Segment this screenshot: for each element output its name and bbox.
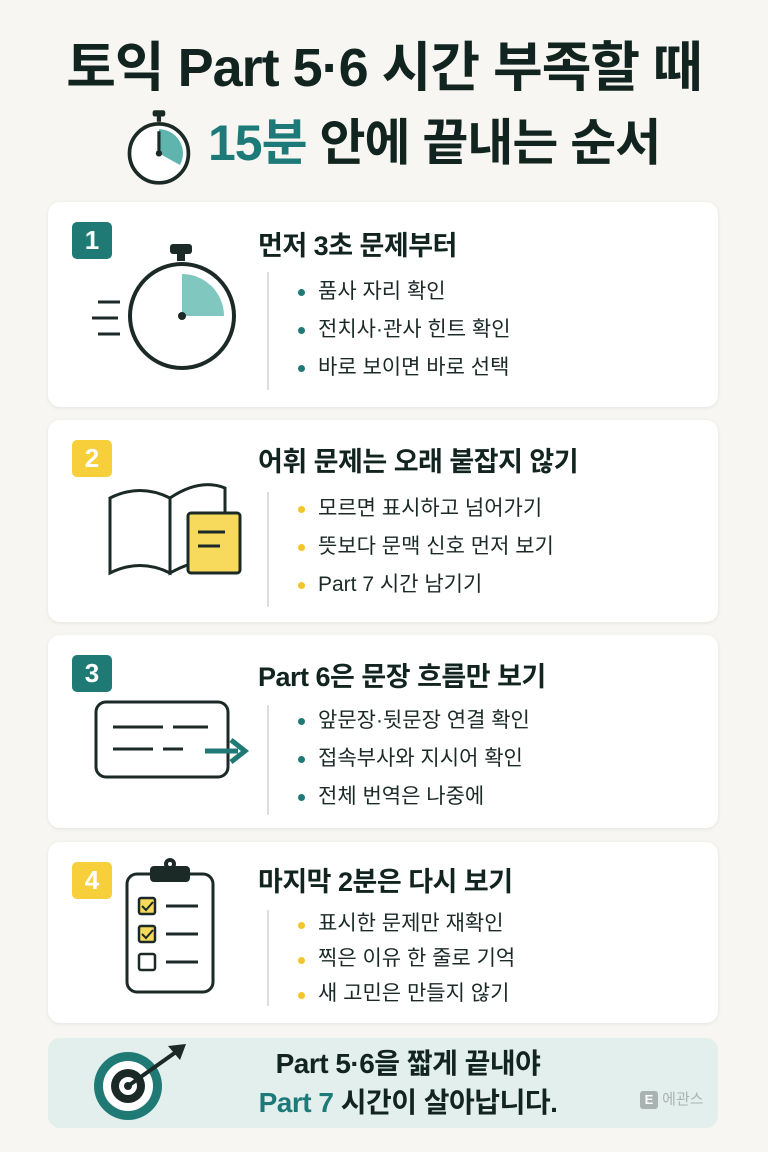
footer text: Part 5·6을 짧게 끝내야 xyxy=(276,1048,540,1079)
badge 2 xyxy=(72,440,112,477)
panel: step 4 xyxy=(48,842,718,1023)
badge 3 xyxy=(72,655,112,692)
bullets: 모르면 표시하고 넘어가기 xyxy=(318,497,542,520)
icon: book with note xyxy=(108,483,242,576)
badge 4: 4 xyxy=(85,865,99,895)
icon: stopwatch xyxy=(92,244,236,370)
watermark xyxy=(640,1091,704,1109)
heading: 마지막 2분은 다시 보기 xyxy=(258,867,513,897)
bullets xyxy=(298,280,511,379)
title: 토익 Part 5·6 시간 부족할 때 xyxy=(66,38,702,98)
bullets xyxy=(298,709,530,808)
bullets: 뜻보다 문맥 신호 먼저 보기 xyxy=(318,535,554,558)
icon: target xyxy=(94,1044,186,1120)
panel: step 2 xyxy=(48,420,718,622)
icon: sentence card arrow xyxy=(94,700,249,778)
bullets: 앞문장·뒷문장 연결 확인 xyxy=(318,709,530,732)
footer text: Part 7 시간이 살아납니다. xyxy=(259,1087,557,1118)
badge 3: 3 xyxy=(85,658,99,688)
icon: clipboard checklist xyxy=(126,858,214,994)
panel: footer callout xyxy=(48,1038,718,1128)
bullets: 접속부사와 지시어 확인 xyxy=(318,747,523,770)
bullets: 품사 자리 확인 xyxy=(318,280,446,303)
watermark: E xyxy=(645,1092,653,1107)
heading: 어휘 문제는 오래 붙잡지 않기 xyxy=(258,447,578,477)
badge 2: 2 xyxy=(85,443,99,473)
badge 1: 1 xyxy=(85,225,99,255)
bullets: 전체 번역은 나중에 xyxy=(318,785,484,808)
subtitle xyxy=(128,110,660,185)
bullets: 바로 보이면 바로 선택 xyxy=(318,356,509,379)
panel: step 1 xyxy=(48,202,718,407)
heading: 먼저 3초 문제부터 xyxy=(258,231,457,261)
bullets: 찍은 이유 한 줄로 기억 xyxy=(318,947,515,970)
icon: stopwatch xyxy=(128,110,190,185)
bullets xyxy=(298,912,515,1005)
panel: step 3 xyxy=(48,635,718,828)
bullets: 표시한 문제만 재확인 xyxy=(318,912,504,935)
watermark: 에관스 xyxy=(662,1091,704,1108)
badge 1 xyxy=(72,222,112,259)
bullets: Part 7 시간 남기기 xyxy=(318,573,482,596)
bullets: 전치사·관사 힌트 확인 xyxy=(318,318,511,341)
heading: Part 6은 문장 흐름만 보기 xyxy=(258,662,546,692)
badge 4 xyxy=(72,862,112,899)
bullets xyxy=(298,497,554,596)
bullets: 새 고민은 만들지 않기 xyxy=(318,982,509,1005)
subtitle: 15분 안에 끝내는 순서 xyxy=(208,115,660,171)
footer text xyxy=(259,1048,557,1118)
